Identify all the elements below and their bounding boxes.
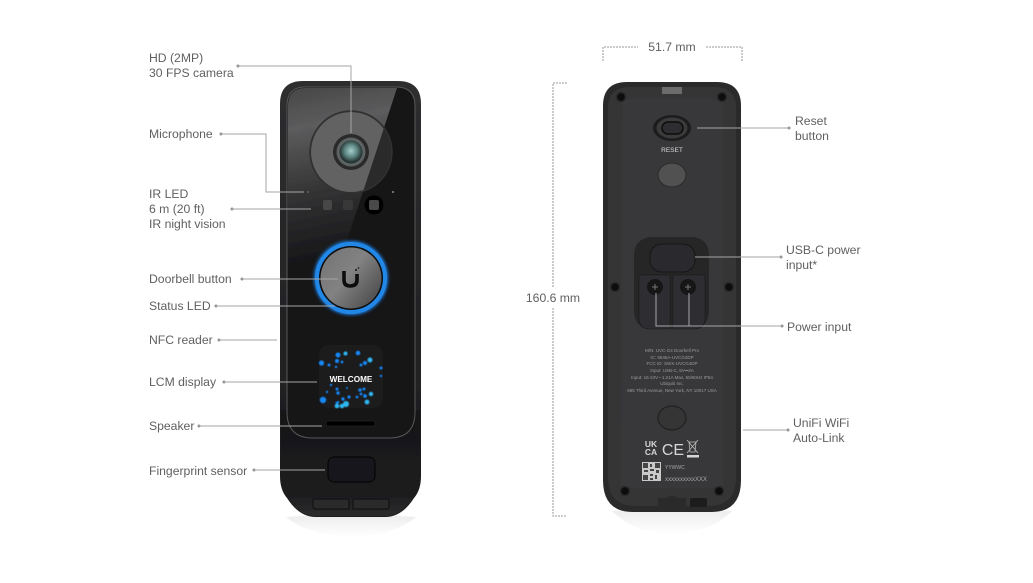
speaker grille — [326, 421, 375, 426]
back body — [603, 82, 741, 512]
front body — [280, 81, 421, 517]
back inner plate — [608, 87, 736, 506]
width dimension — [603, 40, 742, 61]
label: NFC reader: NFC reader — [149, 333, 213, 347]
regulatory text: Input: 16-24V∼1.21A Max, 50/60Hz IP54 — [631, 375, 713, 380]
reflection under front device — [286, 514, 416, 537]
label: IR LED: IR night vision — [149, 217, 226, 231]
corner screws — [610, 92, 734, 496]
label: reset button — [697, 114, 829, 143]
regulatory text: FCC ID: SWX-UVCG4DP — [646, 361, 698, 366]
label: power input: Power input — [787, 320, 852, 334]
serial text — [665, 465, 707, 483]
label: NFC reader — [149, 333, 277, 347]
mounting bracket — [281, 410, 420, 516]
serial text: xxxxxxxxxxXXX — [665, 477, 707, 483]
regulatory text — [627, 348, 717, 393]
IR LED array — [307, 191, 394, 214]
U logo — [344, 271, 357, 286]
label: reset button: Reset — [795, 114, 827, 128]
LCM display — [319, 345, 383, 408]
certification marks: CA — [645, 447, 657, 457]
label: camera — [149, 51, 351, 133]
label: camera: HD (2MP) — [149, 51, 203, 65]
label: LCM display — [149, 375, 317, 389]
serial text: YYWWC — [665, 465, 685, 471]
label: UniFi WiFi Auto-Link: UniFi WiFi — [793, 416, 849, 430]
height dimension — [526, 83, 580, 516]
left terminal slot — [639, 275, 670, 329]
back view of doorbell — [603, 82, 741, 534]
regulatory text: Ubiquiti Inc. — [660, 381, 684, 386]
label: fingerprint sensor: Fingerprint sensor — [149, 464, 247, 478]
regulatory text: IC: 6545A-UVCG4DP — [650, 355, 694, 360]
reset caption: RESET — [661, 147, 683, 154]
label: camera: 30 FPS camera — [149, 66, 234, 80]
label: UniFi WiFi Auto-Link: Auto-Link — [793, 431, 845, 445]
label: USB-C power input: USB-C power — [786, 243, 860, 257]
reflection under back device — [612, 508, 732, 534]
label: microphone — [149, 127, 304, 192]
left terminal screw — [647, 279, 663, 295]
label: reset button: button — [795, 129, 829, 143]
right terminal slot — [673, 275, 705, 329]
regulatory text: 685 Third Avenue, New York, NY 10017 USA — [627, 388, 717, 393]
label: USB-C power input: input* — [786, 258, 817, 272]
glass panel — [287, 87, 415, 438]
front view of doorbell — [280, 81, 421, 537]
label: IR LED — [149, 187, 311, 231]
mounting recess — [634, 237, 709, 329]
right terminal screw — [680, 279, 696, 295]
top clip — [662, 87, 682, 94]
label: speaker: Speaker — [149, 419, 194, 433]
label: IR LED: IR LED — [149, 187, 188, 201]
label: IR LED: 6 m (20 ft) — [149, 202, 205, 216]
label: UniFi WiFi Auto-Link — [743, 416, 849, 445]
welcome label: WELCOME — [330, 375, 373, 384]
label: status LED — [149, 299, 335, 313]
label: fingerprint sensor — [149, 464, 325, 478]
regulatory text: M/N: UVC-G4 Doorbell Pro — [645, 348, 700, 353]
upper sensor window — [658, 163, 686, 187]
height dimension: 160.6 mm — [526, 291, 580, 305]
camera lens — [333, 134, 369, 170]
width dimension: 51.7 mm — [648, 40, 696, 54]
label: speaker — [149, 419, 322, 433]
camera housing — [310, 111, 392, 193]
reset button — [653, 115, 691, 154]
label: USB-C power input — [695, 243, 860, 272]
USB-C cover — [650, 244, 695, 272]
certification marks: CE — [662, 442, 684, 459]
certification marks — [645, 439, 699, 459]
lower sensor window — [658, 406, 686, 430]
label: microphone: Microphone — [149, 127, 213, 141]
regulatory text: Input: USB-C, 5V⎓2A — [650, 368, 694, 373]
fingerprint sensor — [328, 457, 375, 482]
bottom tabs — [313, 499, 389, 509]
central textured panel — [621, 98, 723, 488]
label: power input — [656, 293, 852, 334]
QR code — [642, 462, 661, 481]
label: status LED: Status LED — [149, 299, 211, 313]
glass reflection — [288, 88, 397, 262]
label: LCM display: LCM display — [149, 375, 217, 389]
label: doorbell button: Doorbell button — [149, 272, 232, 286]
certification marks: UK — [645, 439, 658, 449]
label: doorbell button — [149, 272, 338, 286]
bottom clips — [658, 496, 707, 512]
doorbell button with status ring — [317, 244, 385, 312]
